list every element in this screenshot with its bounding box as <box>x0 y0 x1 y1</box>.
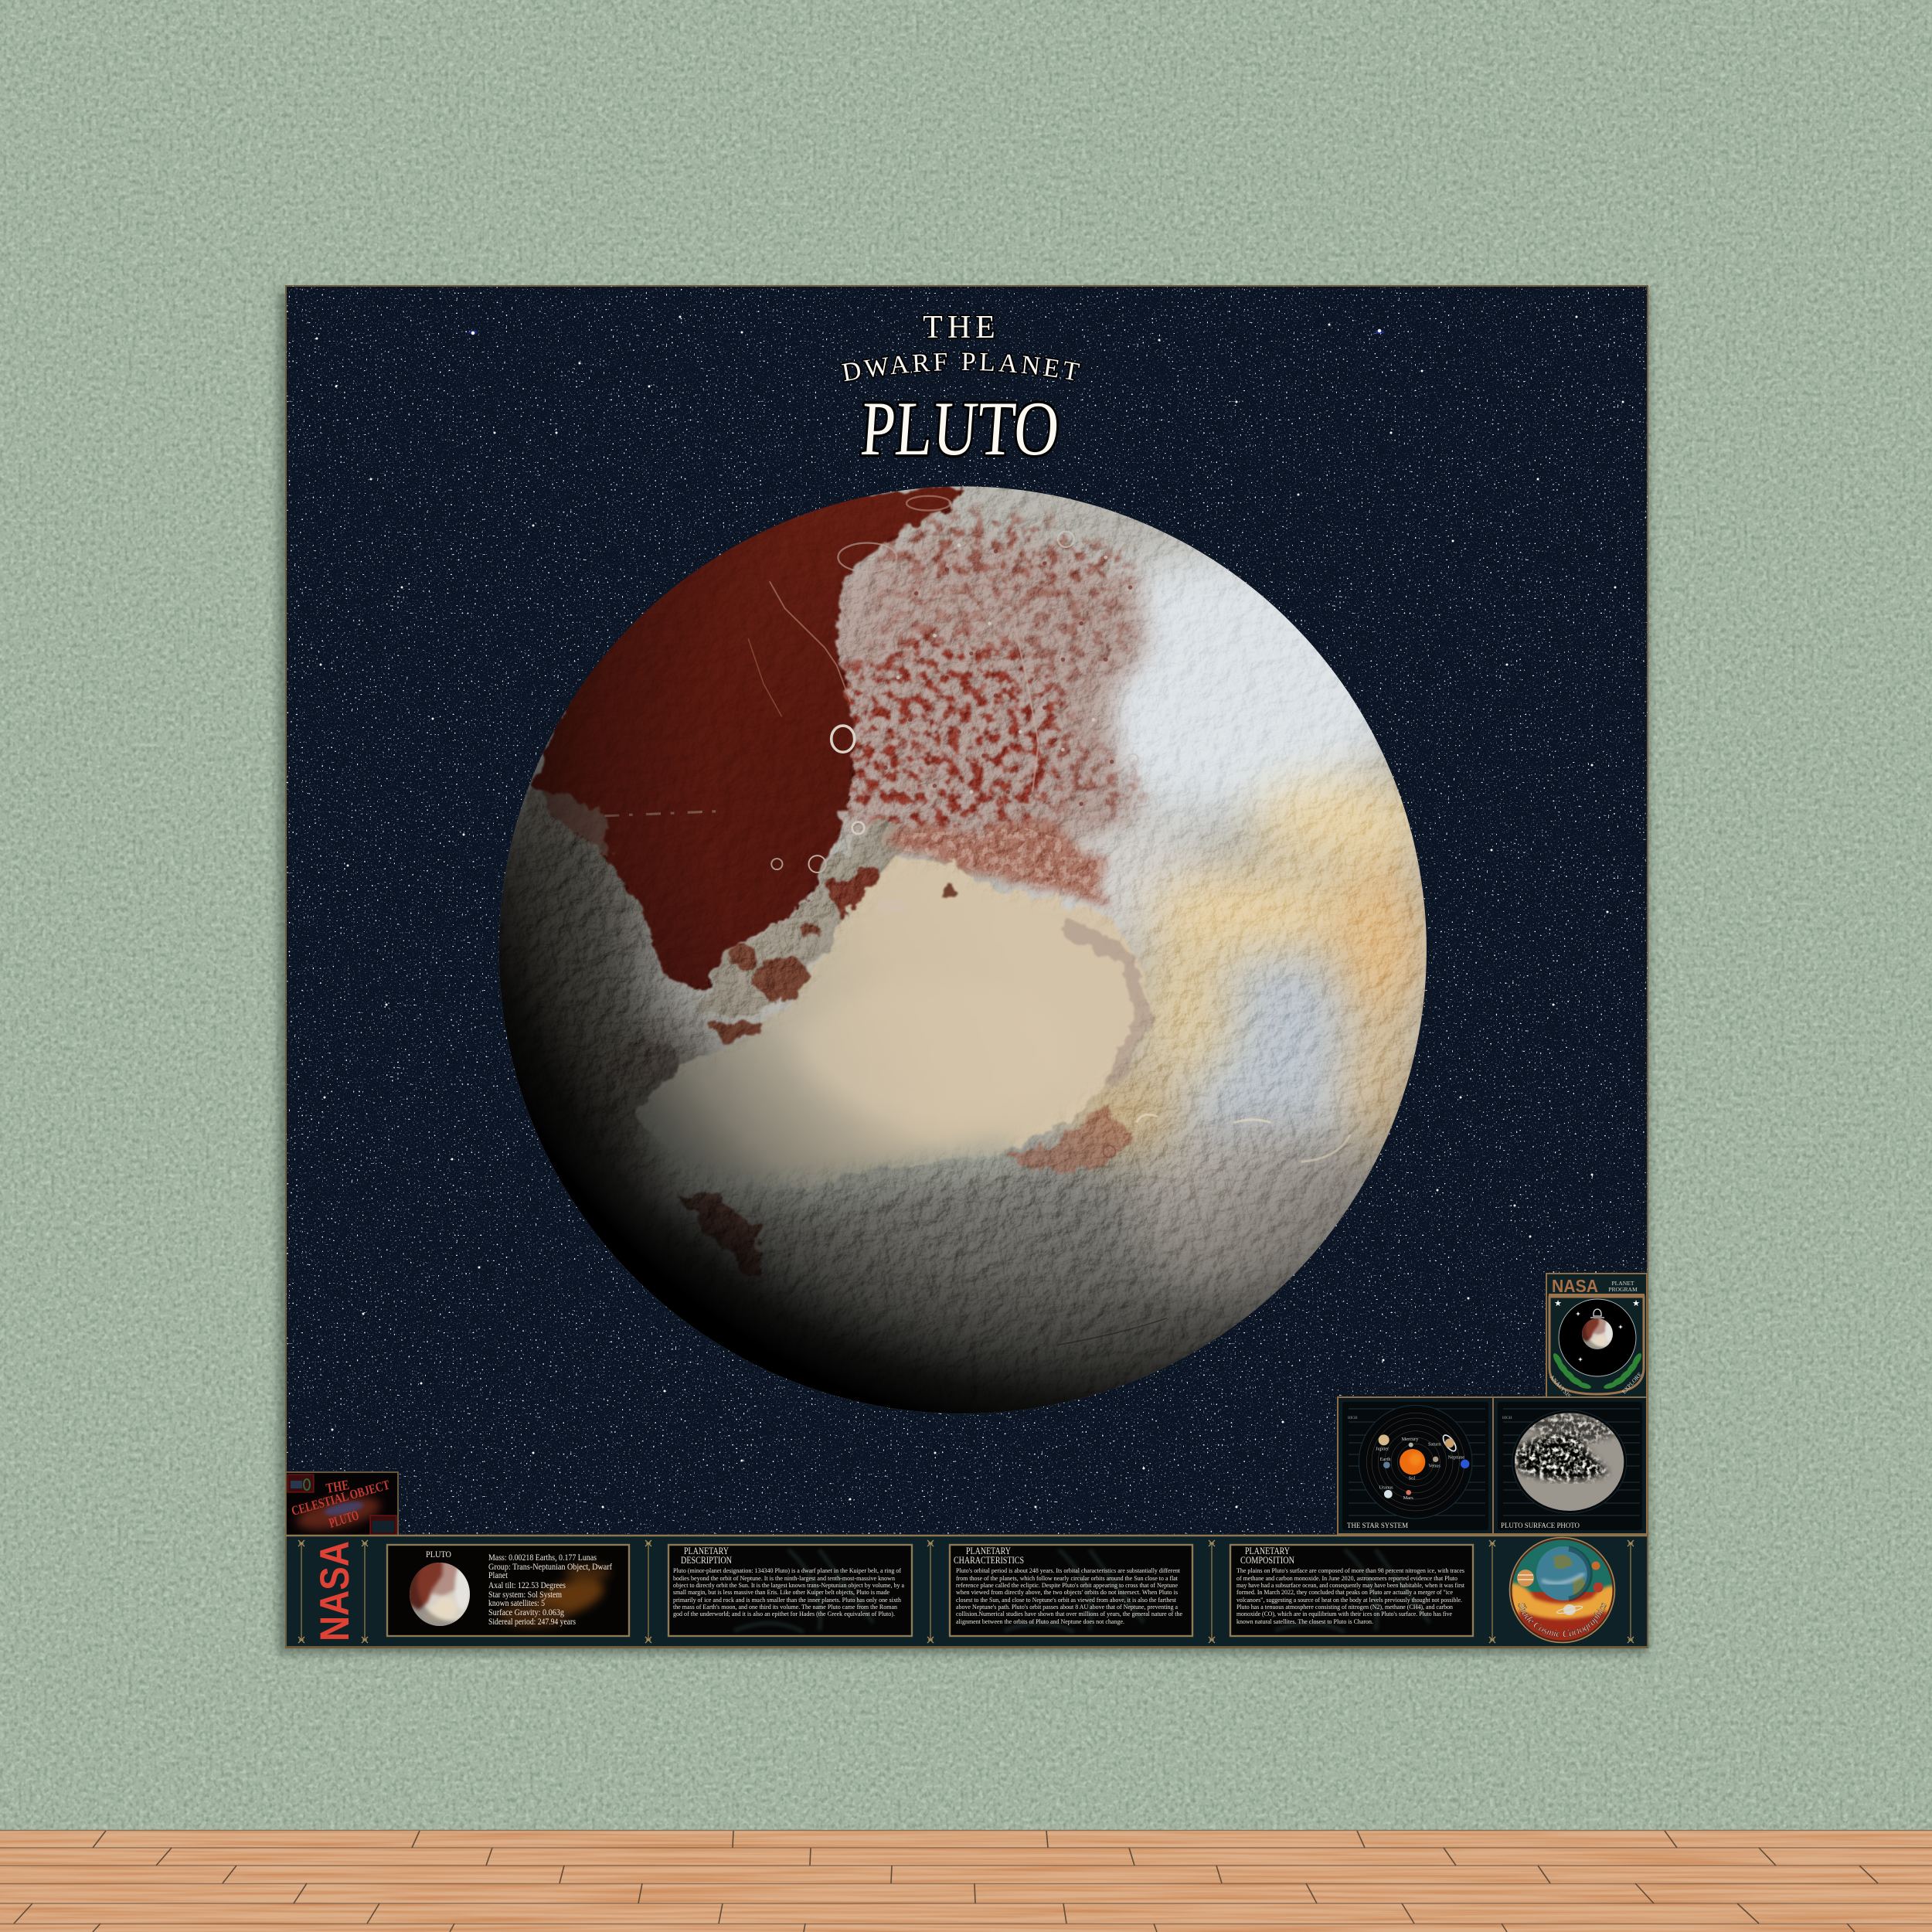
surface colour zones <box>488 551 1436 1411</box>
soft lower edge of heart <box>641 1126 1014 1192</box>
panel: planetary description <box>668 1545 912 1636</box>
poster shadow <box>278 291 1649 1654</box>
NASA logo: NASA <box>312 1541 358 1641</box>
badge mottos: ANALYSIS <box>1549 1373 1573 1400</box>
badge header: PROGRAM <box>1608 1286 1638 1293</box>
emblem text <box>1516 1597 1608 1637</box>
craters and ridges <box>748 496 1350 1345</box>
Sputnik Planitia heart plain <box>635 855 1151 1189</box>
body text: Pluto (minor-planet designation: 134340 Pluto) is a dwarf planet in the Kuiper belt, a ring of <box>673 1566 901 1574</box>
facts list <box>488 1553 612 1627</box>
caption: THE STAR SYSTEM <box>1347 1522 1408 1530</box>
title line: the: THE <box>923 310 1000 345</box>
body text: closest to the Sun, and close to Neptune's orbit as viewed from above, it is also the farthest <box>956 1596 1177 1604</box>
small planets <box>1517 1570 1534 1587</box>
planet base <box>499 486 1427 1413</box>
panel: planetary composition <box>1230 1545 1473 1636</box>
body text: monoxide (CO), which are in equilibrium with their ices on Pluto's surface. Pluto has five <box>1236 1610 1452 1617</box>
mission badge <box>1546 1274 1647 1400</box>
facts list: Group: Trans-Neptunian Object, Dwarf <box>488 1563 612 1572</box>
title <box>840 310 1082 471</box>
panel: pluto surface photo <box>1493 1397 1647 1534</box>
earth <box>1536 1546 1590 1600</box>
body text: god of the underworld; and it is also an epithet for Hades (the Greek equivalent of Pluto). <box>673 1610 895 1617</box>
solar system diagram: Mars <box>1403 1495 1413 1501</box>
title: DWARF PLANET <box>840 351 1082 383</box>
panel: the star system: HIGH <box>1348 1417 1358 1420</box>
mission badge: EXPLORE <box>1621 1371 1644 1395</box>
bright band between red terrain and heart <box>696 816 917 1015</box>
wooden floor <box>0 1830 1932 1932</box>
mottled red highlands <box>831 630 1069 840</box>
red heading: THE <box>325 1477 350 1496</box>
swirl art <box>1005 1549 1144 1632</box>
planet Pluto <box>488 479 1453 1422</box>
panel: pluto surface photo: HIGH <box>1502 1417 1512 1420</box>
laurel leaves <box>1552 1352 1643 1390</box>
body text: primarily of ice and rock and is much smaller than the inner planets. Pluto has only one sixth <box>673 1596 902 1604</box>
solar system diagram: Neptune <box>1448 1454 1464 1460</box>
panel: pluto facts <box>387 1537 629 1636</box>
galaxy image <box>294 1491 383 1536</box>
caption: PLUTO SURFACE PHOTO <box>1501 1522 1580 1530</box>
pale halo around highlands <box>818 533 1148 846</box>
rust band below heart <box>1008 1107 1136 1171</box>
body text: small margin, but is less massive than Eris. Like other Kuiper belt objects, Pluto is made <box>673 1588 889 1596</box>
badge header <box>1549 1276 1645 1297</box>
solar system diagram: Jupiter <box>1376 1447 1389 1452</box>
small crater dots <box>886 551 1130 804</box>
red heading: CELESTIAL OBJECT <box>290 1477 392 1519</box>
panel: planetary characteristics: CHARACTERISTICS <box>954 1555 1024 1566</box>
panel: planetary description: DESCRIPTION <box>681 1555 732 1566</box>
solar system diagram: Earth <box>1380 1457 1391 1462</box>
solar system diagram: Venus <box>1428 1463 1440 1468</box>
panel: the celestial object <box>286 1472 398 1536</box>
body text: collision.Numerical studies have shown that over millions of years, the general nature of the <box>956 1610 1182 1617</box>
solar system diagram <box>1359 1405 1472 1519</box>
body text: may have had a subsurface ocean, and consequently may have been habitable, when it was first <box>1236 1581 1465 1589</box>
terminator shadow <box>499 486 1427 1413</box>
facts list: Surface Gravity: 0.063g <box>488 1608 564 1617</box>
facts list: Sidereal period: 247.94 years <box>488 1617 576 1627</box>
facts list: Planet <box>488 1571 509 1580</box>
body text: from those of the planets, which follow nearly circular orbits around the Sun close to a flat <box>956 1574 1179 1582</box>
solar system diagram: Mercury <box>1402 1437 1419 1442</box>
body text: object to directly orbit the Sun. It is the largest known trans-Neptunian object by volume, by a <box>673 1581 904 1589</box>
planet name: PLUTO <box>426 1550 451 1560</box>
title line: dwarf planet <box>835 370 1090 383</box>
emblem: cosmic cartographics: Shade Cosmic Cartographics <box>1518 1603 1606 1637</box>
heading: PLANETARY <box>966 1546 1011 1556</box>
body text: reference plane called the ecliptic. Despite Pluto's orbit appearing to cross that of Neptune <box>956 1581 1178 1589</box>
swirl art <box>734 1549 873 1632</box>
poster: star field <box>286 286 1648 1648</box>
body text: formed. In March 2022, they concluded that peaks on Pluto are actually a merger of "ice <box>1236 1588 1453 1596</box>
surface relief <box>495 479 1453 1422</box>
heading: PLANETARY <box>684 1546 729 1556</box>
badge stars: ★ <box>1554 1298 1562 1308</box>
panel: planetary composition: COMPOSITION <box>1240 1555 1294 1566</box>
solar system diagram: Saturn <box>1428 1441 1441 1447</box>
body text: volcanoes", suggesting a source of heat on the body at levels previously thought not possible. <box>1236 1596 1462 1604</box>
body text: bodies beyond the orbit of Neptune. It is the ninth-largest and tenth-most-massive known <box>673 1574 896 1582</box>
badge header: NASA <box>1552 1276 1598 1296</box>
heading: PLANETARY <box>1245 1546 1290 1556</box>
small inset boxes <box>287 1475 396 1535</box>
body text: the mass of Earth's moon, and one third its volume. The name Pluto came from the Roman <box>673 1603 898 1611</box>
blocky mountains along heart edge <box>614 888 958 1083</box>
panel: planetary characteristics <box>950 1545 1192 1636</box>
mini pluto <box>406 1537 497 1629</box>
solar system diagram: Sol <box>1409 1476 1415 1481</box>
facts list: Axal tilt: 122.53 Degrees <box>488 1581 566 1590</box>
facts list: Star system: Sol System <box>488 1590 562 1600</box>
footer band <box>286 1536 1648 1648</box>
red heading <box>290 1477 392 1531</box>
body text <box>673 1566 904 1617</box>
badge header: PLANET <box>1611 1280 1634 1287</box>
title line: pluto: PLUTO <box>858 386 1062 471</box>
body text: when viewed from directly above, the two objects' orbits do not intersect. When Pluto is <box>956 1588 1179 1596</box>
surface photo <box>1512 1410 1627 1513</box>
body text: Pluto's orbital period is about 248 years. Its orbital characteristics are substantially different <box>956 1566 1181 1574</box>
dark red Cthulhu region <box>531 485 965 988</box>
body text: above Neptune's path. Pluto's orbit passes about 8 AU above that of Neptune, preventing a <box>956 1603 1178 1611</box>
body text <box>956 1566 1182 1625</box>
body text: Pluto has a tenuous atmosphere consisting of nitrogen (N2), methane (CH4), and carbon <box>1236 1603 1454 1611</box>
swirl art <box>498 1565 611 1628</box>
facts list: Mass: 0.00218 Earths, 0.177 Lunas <box>488 1553 597 1563</box>
badge circle and pluto <box>1552 1299 1643 1390</box>
mission badge: ★ <box>1632 1298 1640 1308</box>
solar system diagram: Uranus <box>1379 1485 1393 1490</box>
facts list: known satellites: 5 <box>488 1599 545 1608</box>
body text: alignment between the orbits of Pluto and Neptune does not change. <box>956 1617 1124 1625</box>
badge shield <box>1549 1297 1644 1394</box>
clouds <box>1511 1583 1615 1623</box>
swirl art <box>1275 1549 1430 1632</box>
body text <box>1236 1566 1465 1625</box>
emblem: cosmic cartographics <box>1507 1538 1618 1646</box>
red heading: PLUTO <box>327 1507 360 1531</box>
body text: known natural satellites. The closest to Pluto is Charon. <box>1236 1617 1373 1625</box>
body text: of methane and carbon monoxide. In June 2020, astronomers reported evidence that Pluto <box>1236 1574 1458 1582</box>
panel: the star system <box>1338 1397 1493 1534</box>
body text: The plains on Pluto's surface are composed of more than 98 percent nitrogen ice, with traces <box>1236 1566 1465 1574</box>
